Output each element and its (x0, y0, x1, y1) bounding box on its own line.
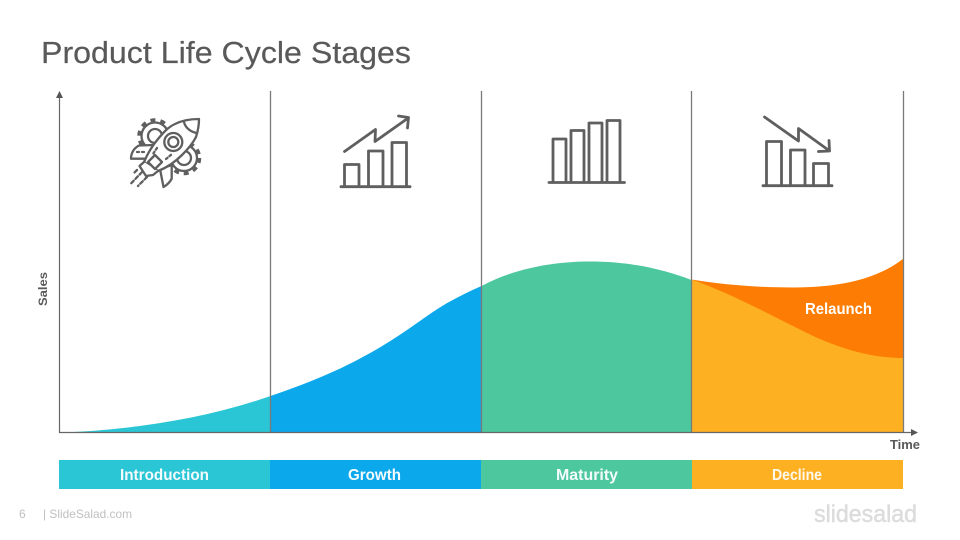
gear top-left (139, 120, 171, 152)
stage: decline (692, 460, 903, 489)
window (164, 133, 182, 151)
gear bottom-right (168, 142, 200, 174)
nose (184, 122, 197, 133)
rocket body (144, 119, 199, 171)
exhaust (131, 170, 147, 186)
x axis arrow (59, 429, 918, 436)
y axis arrow (56, 91, 63, 433)
stage: growth (270, 460, 481, 489)
area: relaunch (692, 258, 904, 358)
right fin (160, 165, 172, 187)
y axis label: Sales (36, 272, 50, 306)
icon: decline chart (763, 117, 832, 186)
page number: 6 (19, 507, 26, 521)
area: growth (270, 286, 482, 432)
stage band (59, 460, 903, 489)
x axis label: Time (890, 437, 920, 452)
icon: growth chart (341, 116, 410, 187)
area chart (36, 91, 920, 452)
relaunch label: Relaunch (805, 301, 872, 318)
area: decline (692, 280, 904, 432)
stage dividers (270, 91, 904, 432)
stage: introduction (59, 460, 270, 489)
left fin (131, 145, 154, 159)
icon: maturity chart (549, 120, 624, 182)
stage: maturity: Maturity (556, 467, 618, 484)
stage: growth: Growth (348, 467, 401, 484)
stage: decline: Decline (772, 467, 822, 484)
nozzle (140, 162, 158, 176)
title: Product Life Cycle Stages (41, 35, 411, 70)
area: introduction (62, 396, 270, 432)
stage: maturity (481, 460, 692, 489)
footer logo: slidesalad (814, 501, 917, 528)
footer source: | SlideSalad.com (43, 507, 132, 521)
icon: rocket with gears (131, 119, 200, 187)
hull dots (153, 148, 172, 159)
area: maturity (482, 262, 692, 432)
stage: introduction: Introduction (120, 467, 209, 484)
